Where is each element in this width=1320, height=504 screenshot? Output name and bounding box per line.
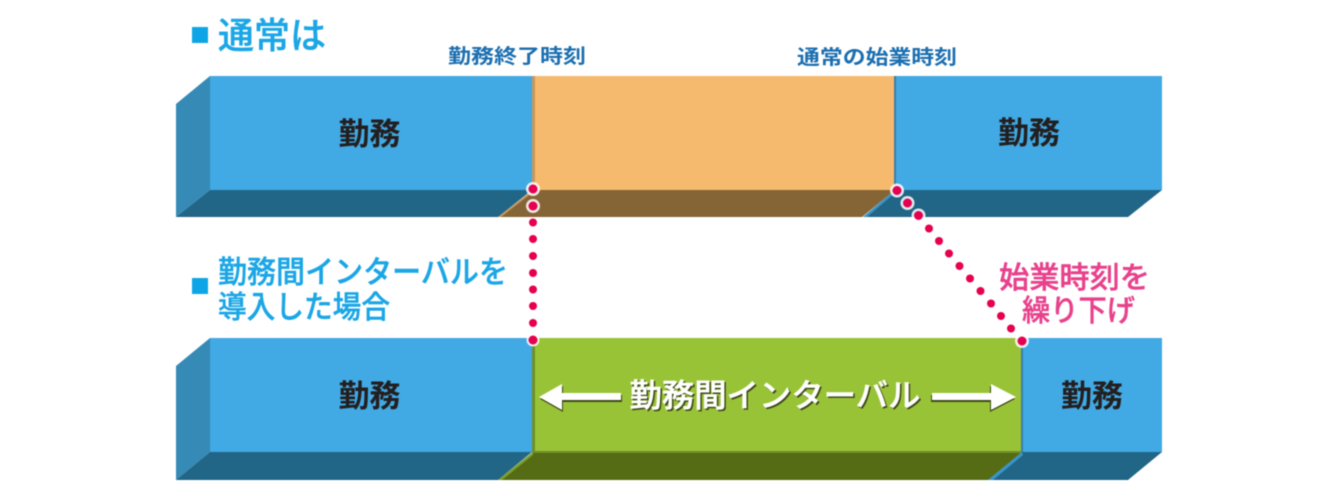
bottom bar green interval block: [498, 338, 1022, 480]
label: work end time: 勤務終了時刻: [448, 45, 586, 68]
arrow: interval right: [931, 384, 1016, 412]
bottom bar left work block: [176, 338, 532, 480]
heading: interval introduced: 勤務間インターバルを: [218, 255, 508, 290]
label: normal start time: 通常の始業時刻: [797, 46, 957, 69]
arrow: interval left: [539, 384, 622, 412]
heading: normal case: 通常は: [218, 15, 326, 56]
bottom bar left work block: 勤務: [338, 379, 400, 414]
top bar right work block: 勤務: [998, 116, 1060, 151]
bottom bar right work block: 勤務: [1061, 379, 1123, 414]
callout: start time moved later: 繰り下げ: [1022, 295, 1135, 328]
top bar left work block: 勤務: [338, 117, 400, 152]
callout: start time moved later: [999, 262, 1150, 328]
dotted line: normal start to delayed start: [890, 184, 1029, 348]
callout: start time moved later: 始業時刻を: [999, 262, 1150, 295]
top bar orange rest block: [498, 76, 895, 217]
dotted line: end of work to interval start: [526, 182, 540, 346]
label: work interval: 勤務間インターバル: [631, 379, 922, 415]
heading: interval introduced: 導入した場合: [218, 290, 390, 325]
top bar right work block: [863, 76, 1162, 217]
bottom bar: with interval: [176, 338, 1162, 480]
label: work interval: 勤務間インターバル: [630, 378, 920, 414]
top bar left work block: [176, 76, 532, 217]
bottom bar right work block: [988, 338, 1162, 480]
heading: interval introduced: [192, 255, 508, 325]
top bar: normal schedule: [176, 76, 1162, 217]
